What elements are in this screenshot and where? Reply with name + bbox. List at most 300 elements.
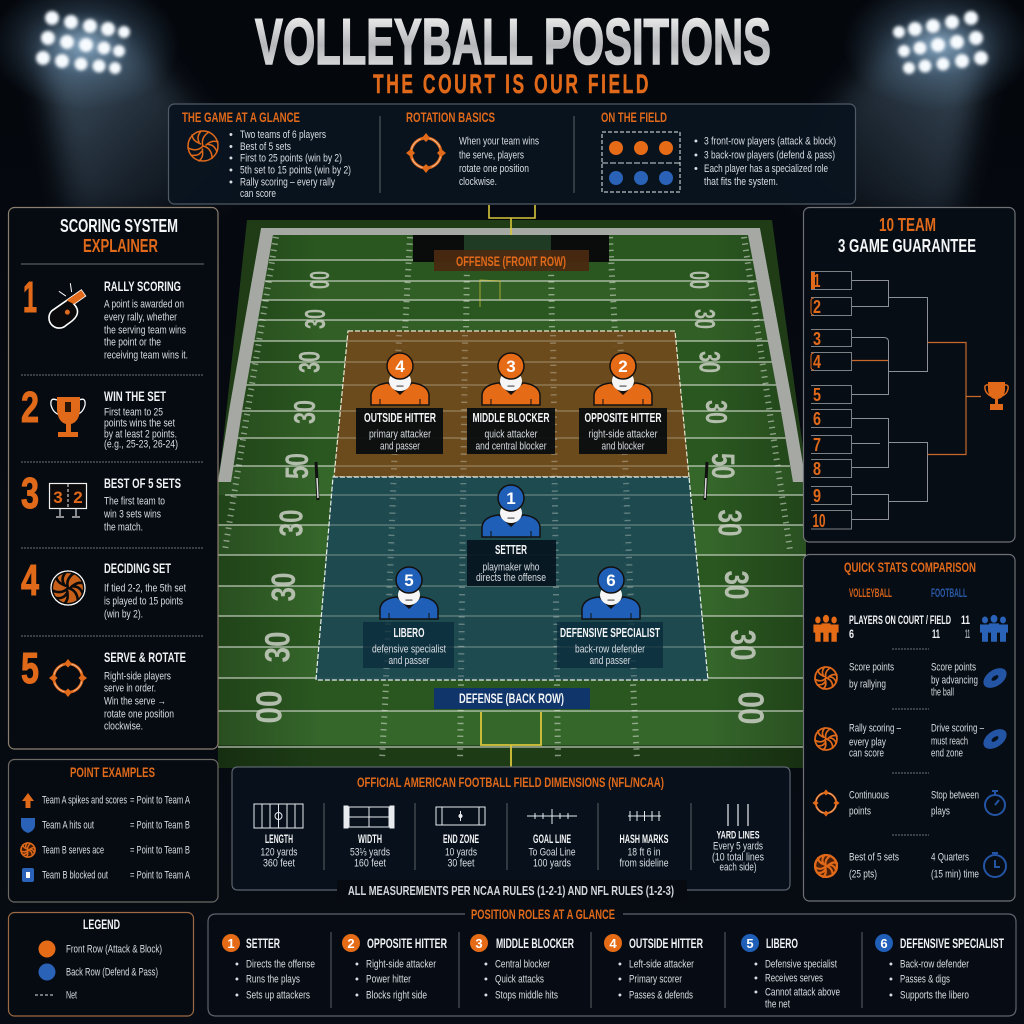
- row: length: Best of 5 sets: [849, 852, 899, 864]
- column: yard lines: YARD LINES: [716, 830, 760, 842]
- bracket seeds: 7: [813, 435, 821, 455]
- name card: and passer: [380, 440, 420, 452]
- role: outside hitter: 4: [609, 936, 617, 951]
- legend item: back row: Back Row (Defend & Pass): [66, 966, 158, 978]
- bullets: on the field: 3 front-row players (attack & block): [704, 136, 836, 148]
- panel: point examples: = Point to Team A: [130, 870, 190, 882]
- bullets: on the field: that fits the system.: [704, 176, 778, 188]
- footnote: ALL MEASUREMENTS PER NCAA RULES (1-2-1) AND NFL RULES (1-2-3): [348, 883, 674, 898]
- heading: rotation basics: ROTATION BASICS: [406, 109, 495, 125]
- yard numbers left: 30: [294, 351, 326, 373]
- step 5 serve and rotate: Right-side players: [104, 670, 171, 682]
- yard numbers left: 30: [287, 400, 322, 424]
- legend item: front row: [38, 940, 162, 958]
- offense label: [434, 250, 589, 271]
- step 5 serve and rotate: 5: [21, 644, 39, 693]
- role: opposite hitter: Blocks right side: [366, 990, 427, 1002]
- column: goal line: 100 yards: [533, 858, 571, 870]
- row: continuous: Continuous: [849, 790, 889, 802]
- role: libero: Defensive specialist: [765, 958, 837, 970]
- step 2 win the set: 2: [21, 383, 39, 432]
- bullets: game facts: •: [229, 176, 233, 188]
- step 1 rally scoring: the serving team wins: [104, 324, 186, 336]
- column: goal line: GOAL LINE: [533, 832, 571, 846]
- icon: scoreboard: 2: [73, 488, 83, 507]
- role: outside hitter: Primary scorer: [629, 974, 682, 986]
- yard numbers right: 30: [723, 630, 762, 660]
- step 1 rally scoring: the point or the: [104, 336, 161, 348]
- role: setter: Runs the plays: [246, 974, 300, 986]
- panel: point examples: Team B serves ace: [42, 844, 104, 856]
- icon: clock: [984, 853, 1006, 877]
- column: hash marks: 18 ft 6 in: [628, 846, 660, 858]
- icon: rotation: [406, 133, 446, 173]
- row: length: (25 pts): [849, 868, 877, 880]
- role: outside hitter: •: [618, 974, 622, 986]
- panel: scoring system explainer: [8, 208, 218, 749]
- column: yard lines: (10 total lines: [712, 852, 764, 864]
- name card: [467, 540, 556, 586]
- player 3 middle blocker: [467, 353, 555, 454]
- panel: point examples: = Point to Team B: [130, 820, 190, 832]
- name card: quick attacker: [484, 428, 538, 440]
- role: libero: Receives serves: [765, 972, 823, 984]
- player 5 libero: [363, 567, 454, 668]
- defense label: DEFENSE (BACK ROW): [459, 690, 564, 706]
- yard numbers left: 50: [279, 453, 315, 479]
- name card: and blocker: [602, 440, 645, 452]
- name card: and passer: [590, 655, 631, 667]
- yard numbers left: 00: [249, 690, 290, 724]
- step 1 rally scoring: receiving team wins it.: [104, 350, 188, 362]
- icon: field width: [344, 806, 394, 828]
- row: length: [811, 852, 1006, 881]
- step 1 rally scoring: RALLY SCORING: [104, 278, 181, 294]
- icon: scoreboard: 3: [53, 488, 63, 507]
- step 5 serve and rotate: Win the serve →: [104, 696, 166, 708]
- defense label: [434, 688, 590, 709]
- yard numbers right: 30: [699, 400, 734, 424]
- heading: position roles: POSITION ROLES AT A GLANCE: [471, 906, 615, 922]
- row: players: 6: [849, 627, 854, 641]
- heading: on the field: ON THE FIELD: [601, 109, 667, 125]
- role: setter: SETTER: [246, 935, 280, 951]
- step 3 best of 5 sets: The first team to: [104, 496, 165, 508]
- column: width: 160 feet: [354, 858, 386, 870]
- role: opposite hitter: Power hitter: [366, 974, 411, 986]
- goal posts: [480, 205, 541, 768]
- role: libero: [741, 934, 840, 1010]
- step 1 rally scoring: 1: [23, 273, 37, 322]
- player 6 defensive specialist: [557, 567, 663, 668]
- yard numbers right: 00: [684, 271, 715, 289]
- column: end zone: [436, 807, 485, 870]
- step 4 deciding set: [21, 556, 186, 620]
- icon: football team: [980, 615, 1008, 642]
- bullets: on the field: •: [694, 150, 698, 162]
- icon: blue player: 1: [506, 489, 516, 508]
- name card: right-side attacker: [588, 428, 658, 440]
- yard numbers left: 00: [304, 271, 335, 289]
- final bracket lines: [852, 342, 981, 454]
- icon: volleyball: [811, 728, 837, 754]
- bullets: game facts: Two teams of 6 players: [240, 129, 326, 141]
- row: rally: every play: [849, 736, 886, 748]
- step 1 rally scoring: [23, 273, 188, 362]
- bracket seeds: 3: [813, 329, 821, 349]
- heading: 3 game guarantee: 3 GAME GUARANTEE: [838, 236, 976, 256]
- role: defensive specialist: 6: [880, 936, 888, 951]
- name card: [557, 622, 663, 668]
- name card: playmaker who: [482, 562, 540, 574]
- side poles: [316, 462, 707, 500]
- name card: LIBERO: [394, 625, 424, 640]
- column: goal line: To Goal Line: [528, 846, 576, 858]
- name card: and passer: [388, 655, 430, 667]
- heading: explainer: EXPLAINER: [83, 236, 158, 256]
- column: hash marks: [620, 811, 668, 870]
- bracket seeds: 5: [813, 385, 821, 405]
- icon: whistle: [38, 280, 93, 332]
- football field: [210, 205, 820, 775]
- step 3 best of 5 sets: 3: [21, 469, 39, 518]
- icon: football: [980, 725, 1010, 753]
- row: length: 4 Quarters: [931, 852, 969, 864]
- column: end zone: 10 yards: [445, 846, 477, 858]
- heading: 10 team: 10 TEAM: [879, 215, 936, 235]
- panel: point examples: = Point to Team A: [130, 794, 190, 806]
- bracket seeds: 9: [813, 486, 821, 506]
- column: hash marks: HASH MARKS: [620, 832, 668, 846]
- icon: trophy: [985, 382, 1008, 410]
- icon: block: [22, 868, 34, 882]
- icon: football: [980, 664, 1010, 692]
- step 4 deciding set: If tied 2-2, the 5th set: [104, 582, 186, 594]
- role: opposite hitter: Right-side attacker: [366, 958, 436, 970]
- role: defensive specialist: •: [889, 958, 893, 970]
- text: rotation: clockwise.: [459, 176, 497, 188]
- yard numbers right: [684, 271, 771, 724]
- row: scoring: Score points: [931, 662, 976, 674]
- column: length: 360 feet: [263, 858, 295, 870]
- step 2 win the set: First team to 25: [104, 406, 163, 418]
- role: outside hitter: Passes & defends: [629, 990, 693, 1002]
- step 1 rally scoring: A point is awarded on: [104, 298, 184, 310]
- icon: volleyball: [183, 131, 219, 166]
- heading: scoring system: SCORING SYSTEM: [60, 216, 178, 236]
- column: yard lines: Every 5 yards: [713, 840, 763, 852]
- column head: football: FOOTBALL: [931, 586, 967, 600]
- role: libero: Cannot attack above: [765, 986, 840, 998]
- column: yard lines: [712, 804, 764, 874]
- heading: game at a glance: THE GAME AT A GLANCE: [182, 109, 300, 125]
- panel: position roles at a glance: [208, 906, 1016, 1016]
- icon: volleyball: [811, 667, 837, 693]
- icon: ball: [18, 843, 35, 860]
- row: scoring: by rallying: [849, 678, 886, 690]
- role: opposite hitter: •: [355, 958, 359, 970]
- icon: blue player: 5: [404, 571, 414, 590]
- bullets: game facts: can score: [240, 188, 276, 200]
- legend item: net: Net: [66, 990, 77, 1002]
- row: rally: must reach: [931, 736, 968, 748]
- role: defensive specialist: [875, 934, 1004, 1002]
- name card: MIDDLE BLOCKER: [472, 410, 550, 425]
- yard numbers right: 30: [717, 570, 755, 600]
- role: middle blocker: MIDDLE BLOCKER: [496, 935, 574, 951]
- role: defensive specialist: Passes & digs: [900, 974, 950, 986]
- row: scoring: Score points: [849, 662, 894, 674]
- role: opposite hitter: 2: [347, 936, 355, 951]
- role: setter: [222, 934, 315, 1002]
- name card: primary attacker: [369, 428, 431, 440]
- name card: defensive specialist: [372, 644, 446, 656]
- bracket lines: [852, 280, 928, 520]
- row: continuous: plays: [931, 806, 950, 818]
- text: rotation: the serve, players: [459, 150, 524, 162]
- role: setter: •: [235, 974, 239, 986]
- bracket seeds: 2: [813, 297, 821, 317]
- diagram: on the field: [602, 132, 680, 192]
- column: length: LENGTH: [265, 832, 293, 846]
- column: end zone: END ZONE: [443, 832, 479, 846]
- role: libero: the net: [765, 998, 790, 1010]
- sideline border: [218, 228, 806, 482]
- floodlight lamps right: [893, 11, 988, 74]
- row: rally: Drive scoring –: [931, 722, 985, 734]
- name card: [363, 622, 454, 668]
- yard numbers right: 30: [711, 510, 748, 536]
- role: middle blocker: •: [484, 974, 488, 986]
- heading: point examples: POINT EXAMPLES: [70, 764, 155, 780]
- bullets: game facts: 5th set to 15 points (win by 2): [240, 164, 351, 176]
- role: outside hitter: •: [618, 958, 622, 970]
- row: rally: [811, 722, 1010, 760]
- floodlight glow right: [735, 0, 1024, 215]
- row: players: [813, 613, 1008, 642]
- row: players: 11: [932, 627, 940, 641]
- player 4 outside hitter: [356, 353, 443, 454]
- panel: field dimensions: [232, 767, 790, 902]
- bullets: game facts: •: [229, 141, 233, 153]
- icon: trophy: [51, 397, 85, 437]
- role: middle blocker: •: [484, 990, 488, 1002]
- icon: rotation: [49, 659, 87, 697]
- role: opposite hitter: •: [355, 974, 359, 986]
- heading: dimensions: OFFICIAL AMERICAN FOOTBALL FIELD DIMENSIONS (NFL/NCAA): [357, 774, 664, 790]
- subtitle: THE COURT IS OUR FIELD: [373, 69, 651, 99]
- row: players: PLAYERS ON COURT / FIELD: [849, 613, 951, 627]
- name card: OUTSIDE HITTER: [364, 410, 436, 425]
- bullets: on the field: •: [694, 163, 698, 175]
- bullets: game facts: [229, 129, 351, 200]
- role: libero: LIBERO: [766, 935, 798, 951]
- yard numbers left: 30: [265, 572, 303, 602]
- bracket seeds: 10: [812, 511, 826, 531]
- role: middle blocker: •: [484, 958, 488, 970]
- panel: the game at a glance top bar: [168, 104, 856, 204]
- step 5 serve and rotate: rotate one position: [104, 708, 174, 720]
- role: middle blocker: 3: [475, 936, 483, 951]
- legend item: back row: [38, 964, 158, 980]
- yard numbers right: 30: [688, 309, 720, 329]
- row: continuous: points: [849, 806, 871, 818]
- panel: legend: [8, 912, 194, 1016]
- role: setter: Sets up attackers: [246, 990, 310, 1002]
- zone yard lines overlay: [318, 341, 706, 647]
- row: scoring: [811, 662, 1010, 698]
- name card: DEFENSIVE SPECIALIST: [560, 625, 660, 640]
- panel: point examples: [8, 760, 218, 902]
- role: libero: 5: [746, 936, 754, 951]
- step 5 serve and rotate: serve in order.: [104, 682, 156, 694]
- icon: shield: [21, 818, 35, 833]
- floodlight glow left: [0, 0, 290, 215]
- text: rotation: rotate one position: [459, 163, 529, 175]
- row: rally: Rally scoring –: [849, 722, 902, 734]
- column: yard lines: each side): [720, 862, 756, 874]
- icon: orange player: 4: [395, 357, 405, 376]
- yard numbers left: 30: [300, 309, 332, 329]
- bracket seeds: 8: [813, 459, 821, 479]
- text: rotation: When your team wins: [459, 136, 539, 148]
- panel: tournament bracket: [804, 208, 1015, 542]
- name card: [356, 408, 443, 454]
- icon: yard lines: [728, 804, 748, 826]
- icon: end zone: [436, 807, 485, 825]
- row: scoring: the ball: [931, 686, 954, 698]
- back row zone: [316, 477, 708, 680]
- yard numbers right: 50: [705, 453, 741, 479]
- role: opposite hitter: •: [355, 990, 359, 1002]
- bullets: game facts: •: [229, 152, 233, 164]
- name card: [579, 408, 667, 454]
- icon: volleyball: [811, 855, 837, 881]
- icon: goal line: [527, 809, 577, 824]
- name card: OPPOSITE HITTER: [584, 410, 662, 425]
- column: length: [254, 804, 303, 870]
- step 5 serve and rotate: clockwise.: [104, 720, 143, 732]
- end zone dark block: [413, 235, 609, 262]
- legend item: net: [35, 990, 77, 1002]
- bracket seeds: [811, 271, 852, 531]
- panel: quick stats comparison: [804, 554, 1015, 901]
- panel: point examples: Team A spikes and scores: [42, 794, 127, 806]
- step 5 serve and rotate: [21, 644, 186, 732]
- heading: legend: LEGEND: [83, 916, 120, 932]
- step 4 deciding set: (win by 2).: [104, 608, 143, 620]
- bullets: game facts: •: [229, 129, 233, 141]
- bullets: game facts: •: [229, 164, 233, 176]
- role: setter: •: [235, 990, 239, 1002]
- text: rotation: [459, 136, 539, 188]
- column: width: [344, 806, 394, 870]
- yard numbers left: 30: [273, 510, 310, 536]
- role: setter: 1: [227, 936, 235, 951]
- role: libero: •: [754, 958, 758, 970]
- icon: orange player: 2: [618, 357, 628, 376]
- role: defensive specialist: •: [889, 990, 893, 1002]
- icon: blue player: 6: [606, 571, 616, 590]
- name card: back-row defender: [575, 644, 645, 656]
- role: defensive specialist: Back-row defender: [900, 958, 969, 970]
- column: goal line: [527, 809, 577, 870]
- icon: scoreboard: [50, 484, 86, 517]
- player 1 setter: [467, 485, 556, 586]
- row: scoring: by advancing: [931, 674, 978, 686]
- icon: rotation: [812, 789, 840, 817]
- icon: stopwatch: [985, 791, 1005, 815]
- row: players: 11: [965, 627, 970, 641]
- role: setter: •: [235, 958, 239, 970]
- step 3 best of 5 sets: win 3 sets wins: [103, 508, 161, 520]
- step 2 win the set: [21, 383, 178, 450]
- row: rally: end zone: [931, 748, 963, 760]
- role: opposite hitter: OPPOSITE HITTER: [367, 935, 447, 951]
- icon: volleyball: [46, 571, 85, 610]
- row: continuous: Stop between: [931, 790, 979, 802]
- panel: point examples: Team A hits out: [42, 820, 94, 832]
- role: libero: •: [754, 972, 758, 984]
- yard numbers left: 30: [258, 632, 297, 662]
- icon: hash marks: [628, 811, 661, 821]
- zone hash marks overlay: [386, 335, 634, 680]
- yard numbers right: 00: [730, 692, 771, 724]
- step 3 best of 5 sets: the match.: [104, 522, 143, 534]
- icon: field length: [254, 804, 303, 828]
- step 1 rally scoring: every rally, whether: [104, 312, 177, 324]
- bullets: on the field: Each player has a specialized role: [704, 163, 828, 175]
- step 4 deciding set: is played to 15 points: [104, 596, 183, 608]
- role: middle blocker: Central blocker: [495, 958, 550, 970]
- step 4 deciding set: DECIDING SET: [104, 560, 171, 576]
- step 5 serve and rotate: SERVE & ROTATE: [104, 649, 186, 665]
- column head: volleyball: VOLLEYBALL: [849, 586, 892, 600]
- bullets: on the field: 3 back-row players (defend & pass): [704, 150, 835, 162]
- bullets: on the field: [694, 136, 836, 188]
- bullets: game facts: Best of 5 sets: [240, 141, 291, 153]
- role: outside hitter: Left-side attacker: [629, 958, 694, 970]
- role: opposite hitter: [342, 934, 447, 1002]
- role: defensive specialist: •: [889, 974, 893, 986]
- name card: SETTER: [495, 542, 527, 557]
- icon: arrow up: [22, 793, 34, 808]
- bullets: game facts: First to 25 points (win by 2): [240, 152, 342, 164]
- step 3 best of 5 sets: BEST OF 5 SETS: [104, 475, 181, 491]
- bracket seeds: 6: [813, 409, 821, 429]
- column: length: 120 yards: [260, 846, 298, 858]
- yard numbers left: [249, 271, 335, 724]
- role: middle blocker: Stops middle hits: [495, 990, 558, 1002]
- row: length: (15 min) time: [931, 868, 979, 880]
- floodlight lamps left: [36, 11, 130, 74]
- bracket seeds: 1: [814, 271, 820, 291]
- front row zone: [334, 331, 689, 477]
- legend item: front row: Front Row (Attack & Block): [66, 944, 162, 956]
- icon: volleyball team: [813, 615, 839, 642]
- bullets: on the field: •: [694, 136, 698, 148]
- role: middle blocker: [470, 934, 574, 1002]
- offense label: OFFENSE (FRONT ROW): [456, 253, 566, 269]
- role: outside hitter: •: [618, 990, 622, 1002]
- role: defensive specialist: Supports the libero: [900, 990, 969, 1002]
- column: end zone: 30 feet: [448, 858, 474, 870]
- role: middle blocker: Quick attacks: [495, 974, 544, 986]
- yard numbers right: 30: [692, 351, 726, 373]
- role: outside hitter: OUTSIDE HITTER: [629, 935, 703, 951]
- row: players: 11: [961, 613, 970, 627]
- role: outside hitter: [604, 934, 703, 1002]
